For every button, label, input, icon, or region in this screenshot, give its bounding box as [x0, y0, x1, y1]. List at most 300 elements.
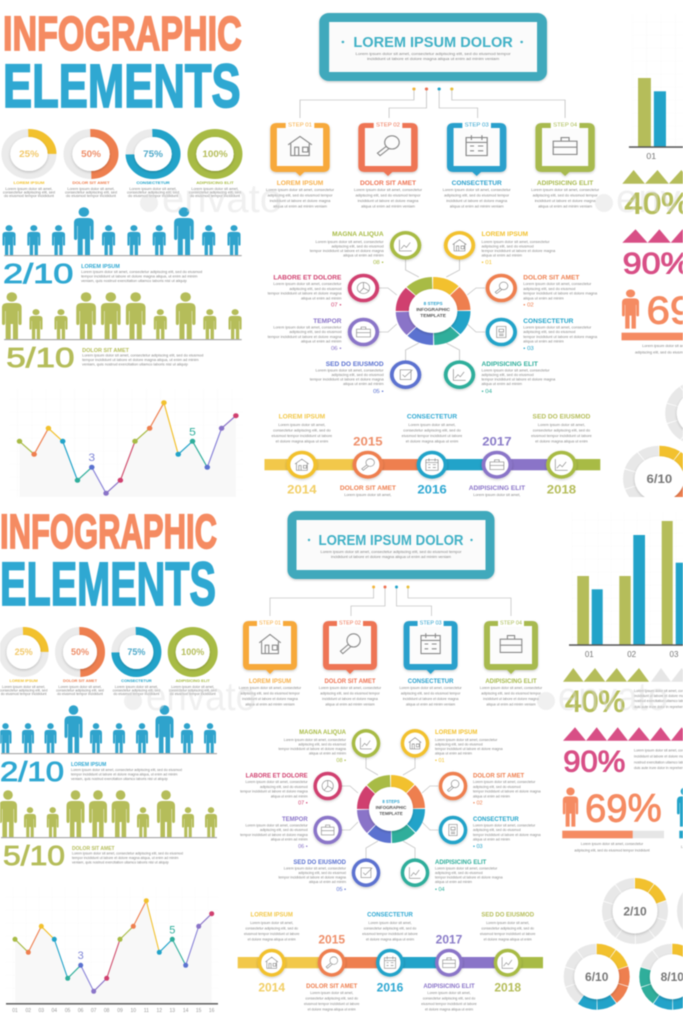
central wheel: TEMPLATE [379, 811, 403, 816]
item 1: • 01 [435, 758, 445, 764]
central wheel: 8 STEPS [424, 301, 443, 306]
ring 100% [169, 631, 217, 696]
line chart: 03 [45, 510, 52, 516]
item 6: tempor incididunt ut labore et dolore magna [240, 833, 308, 837]
node 2015: DOLOR SIT AMET [306, 984, 358, 990]
line chart [16, 400, 240, 497]
step 3: STEP 03 [465, 123, 489, 128]
bar chart: 01 [646, 151, 656, 161]
item 1: tempor incididunt ut labore et dolore magna [482, 249, 556, 253]
node 2016: consectetur adipiscing elit, sed do [403, 429, 461, 433]
step 2: Lorem ipsum dolor sit amet, consectetur [354, 188, 423, 192]
step 1: incididunt ut labore et dolore magna [270, 199, 331, 203]
step 2: STEP 02 [339, 620, 361, 626]
central wheel: TEMPLATE [420, 313, 446, 318]
node 2015: 2015 [318, 933, 345, 947]
step 3: incididunt ut labore et dolore magna [446, 199, 508, 203]
ring 25% [3, 133, 55, 198]
item 3: aliqua ut enim ad minim [473, 837, 510, 841]
ring 50%: consectetur adipiscing elit, sed [65, 191, 117, 195]
stat 5/10: 5/10 [6, 342, 75, 374]
item 8: MAGNA ALIQUA [332, 231, 384, 238]
bar chart [628, 77, 683, 160]
bar chart: 02 [627, 650, 637, 659]
line chart: 11 [144, 1008, 149, 1014]
line chart: 09 [117, 1008, 123, 1014]
node 2015: Lorem ipsum dolor sit amet, [310, 991, 353, 995]
item 6: adipiscing elit, sed do eiusmod [260, 828, 308, 832]
stat 90% [622, 229, 683, 280]
node 2014 [244, 913, 299, 995]
stat 40% [622, 170, 683, 220]
line chart: 07 [103, 510, 109, 516]
item 7: tempor incididunt ut labore et dolore magna [268, 292, 342, 296]
item 1 [401, 729, 503, 764]
node 2014 [272, 414, 332, 497]
item 2: adipiscing elit, sed do eiusmod [523, 287, 575, 291]
node 2018: et dolore magna aliqua ut enim [484, 938, 532, 942]
item 8: aliqua ut enim ad minim [343, 254, 384, 257]
stat 2/10: tempor incididunt ut labore et dolore magna aliqua, ut enim ad minim [81, 275, 197, 278]
steps [266, 121, 600, 208]
item 7: 07 • [298, 800, 308, 806]
step 2: incididunt ut labore et dolore magna [358, 199, 419, 203]
header box: Lorem ipsum dolor sit amet, consectetur adipiscing elit, sed do eiusmod tempor [320, 550, 462, 554]
item 4: Lorem ipsum dolor sit amet, consectetur [482, 369, 550, 372]
ring 75% [127, 133, 179, 198]
steps [239, 619, 543, 706]
central wheel [363, 781, 419, 837]
stat 69%: 69% [585, 788, 662, 831]
step 1 [239, 619, 302, 706]
line chart: 15 [219, 510, 225, 516]
item 3: Lorem ipsum dolor sit amet, consectetur [523, 326, 592, 330]
item 5: aliqua ut enim ad minim [309, 880, 346, 884]
item 8: 08 • [336, 758, 346, 764]
ring 25%: do eiusmod tempor incididunt [4, 194, 54, 198]
node 2017: eiusmod tempor incididunt ut labore [421, 1002, 477, 1006]
ring 75%: Lorem ipsum dolor sit amet, [129, 187, 177, 191]
line chart [6, 887, 218, 1014]
step 1: adipiscing elit, sed do eiusmod tempor [240, 692, 301, 696]
item 2 [439, 772, 541, 806]
stat 2/10 [4, 262, 202, 285]
item 5: SED DO EIUSMOD [293, 860, 347, 866]
ring 50%: DOLOR SIT AMET [72, 180, 110, 185]
line chart: 13 [189, 510, 196, 516]
item 3: Lorem ipsum dolor sit amet, consectetur [473, 824, 536, 828]
step 2: DOLOR SIT AMET [360, 180, 416, 187]
step 4: Lorem ipsum dolor sit amet, consectetur [480, 686, 543, 690]
line chart: 09 [132, 510, 138, 516]
line chart: 07 [91, 1008, 97, 1014]
header box: LOREM IPSUM DOLOR [353, 35, 513, 51]
step 2: Lorem ipsum dolor sit amet, consectetur [319, 686, 382, 690]
item 3: adipiscing elit, sed do eiusmod [473, 828, 521, 832]
progress rings [3, 133, 241, 198]
ring 75%: CONSECTETUR [136, 180, 170, 185]
step 2: adipiscing elit, sed do eiusmod tempor [320, 692, 381, 696]
item 6: 06 • [298, 844, 308, 850]
ring 25%: consectetur adipiscing elit, sed [3, 191, 55, 195]
node 2017: 2017 [436, 933, 463, 947]
item 6: TEMPOR [282, 817, 308, 823]
node 2017 [421, 933, 477, 1012]
node 2018 [480, 913, 535, 995]
stat 69% [622, 289, 683, 354]
stat 5/10 [6, 346, 204, 369]
step 1: aliqua ut enim ad minim veniam [273, 205, 327, 208]
item 7: adipiscing elit, sed do eiusmod [289, 287, 341, 291]
step 1 [266, 121, 335, 208]
item 8 [278, 729, 380, 764]
item 7: Lorem ipsum dolor sit amet, consectetur [273, 282, 342, 286]
bottom sheet [0, 506, 683, 1014]
item 3 [486, 318, 598, 352]
item 8: MAGNA ALIQUA [299, 730, 347, 736]
step 2: incididunt ut labore et dolore magna [322, 697, 378, 701]
stat 2/10: LOREM IPSUM [71, 762, 106, 768]
item 8: aliqua ut enim ad minim [309, 752, 346, 756]
item 8: adipiscing elit, sed do eiusmod [298, 742, 346, 746]
item 6: adipiscing elit, sed do eiusmod [289, 330, 341, 334]
donut 8/10 [645, 949, 683, 1004]
node 2015: DOLOR SIT AMET [340, 485, 396, 492]
header box [288, 511, 494, 579]
item 1: tempor incididunt ut labore et dolore magna [435, 747, 503, 751]
stat female [677, 787, 683, 849]
line chart: 11 [161, 510, 167, 516]
step 4: adipiscing elit, sed do eiusmod tempor [481, 692, 542, 696]
ring 25%: do eiusmod tempor incididunt [1, 692, 46, 696]
line chart: 3 [78, 950, 84, 962]
ring 50% [56, 631, 104, 696]
item 5: aliqua ut enim ad minim [343, 382, 384, 386]
step 4: incididunt ut labore et dolore magna [535, 199, 597, 203]
ring 100%: consectetur adipiscing elit, sed [189, 191, 241, 195]
node 2016: et dolore magna aliqua ut enim [366, 938, 414, 942]
line chart: 04 [60, 510, 66, 516]
node 2018: eiusmod tempor incididunt ut labore [531, 434, 592, 438]
item 6 [268, 318, 379, 352]
node 2015: Lorem ipsum dolor sit amet, [344, 493, 391, 497]
watermark: envato [124, 177, 683, 719]
progress rings [0, 631, 217, 696]
node 2014: eiusmod tempor incididunt ut labore [244, 932, 299, 936]
step 1: STEP 01 [259, 620, 281, 626]
timeline [238, 913, 543, 1012]
item 5: SED DO EIUSMOD [326, 361, 384, 368]
ring 25%: Lorem ipsum dolor sit amet, [2, 685, 45, 689]
item 5: adipiscing elit, sed do eiusmod [331, 373, 384, 377]
item 2: tempor incididunt ut labore et dolore magna [473, 790, 541, 794]
stat 5/10: veniam, quis nostrud exercitation ullamco laboris nisi ut aliquip [72, 860, 169, 864]
node 2016: Lorem ipsum dolor sit amet, [408, 423, 456, 427]
ring 50%: consectetur adipiscing elit, sed [56, 689, 104, 693]
item 8 [310, 231, 421, 266]
stat 2/10: LOREM IPSUM [81, 264, 121, 270]
line chart: 14 [183, 1008, 189, 1014]
ring 50%: do eiusmod tempor incididunt [66, 194, 116, 198]
node 2016: 2016 [417, 483, 447, 497]
central wheel: INFOGRAPHIC [416, 307, 451, 312]
watermark: envato: envato [558, 675, 668, 719]
line chart: 05 [65, 1008, 71, 1014]
line chart: 3 [88, 452, 95, 464]
node 2014: consectetur adipiscing elit, sed do [245, 927, 298, 931]
item 8: Lorem ipsum dolor sit amet, consectetur [284, 738, 347, 742]
ring 75%: do eiusmod tempor incididunt [114, 692, 159, 696]
node 2014: 2014 [258, 981, 285, 995]
ring 75%: do eiusmod tempor incididunt [128, 194, 178, 198]
line chart: 06 [78, 1008, 84, 1014]
stat 2/10: veniam, quis nostrud exercitation ullamco laboris nisi ut aliquip [71, 777, 168, 781]
stat 90%: 90% [563, 746, 625, 779]
item 1: LOREM IPSUM [482, 231, 528, 238]
step 1: Lorem ipsum dolor sit amet, consectetur [239, 686, 302, 690]
ring 50%: Lorem ipsum dolor sit amet, [67, 187, 115, 191]
line chart: 12 [175, 510, 181, 516]
item 7: Lorem ipsum dolor sit amet, consectetur [245, 780, 309, 784]
connector lines [270, 586, 511, 616]
line chart: 10 [131, 1008, 136, 1014]
node 2016: Lorem ipsum dolor sit amet, [368, 921, 412, 925]
node 2018: Lorem ipsum dolor sit amet, [486, 921, 529, 925]
step 1: STEP 01 [288, 123, 312, 128]
title [4, 14, 242, 110]
item 4: ADIPISICING ELIT [435, 860, 487, 866]
item 4: aliqua ut enim ad minim [482, 382, 522, 386]
node 2017: Lorem ipsum dolor sit amet, [427, 991, 471, 995]
ring 75%: 75% [143, 149, 164, 160]
bar chart: 01 [585, 650, 594, 659]
stat 2/10: Lorem ipsum dolor sit amet, consectetur adipiscing elit, sed do eiusmod [71, 768, 182, 772]
ring 25%: LOREM IPSUM [14, 180, 45, 185]
ring 75%: CONSECTETUR [121, 678, 152, 683]
node 2016: et dolore magna aliqua ut enim [406, 440, 458, 444]
stat 5/10: Lorem ipsum dolor sit amet, consectetur adipiscing elit, sed do eiusmod [72, 852, 183, 856]
node 2018 [531, 414, 592, 497]
stat 5/10: DOLOR SIT AMET [72, 846, 115, 852]
item 4 [401, 858, 503, 893]
node 2018: eiusmod tempor incididunt ut labore [480, 932, 535, 936]
node 2017: eiusmod tempor incididunt ut labore [467, 504, 527, 508]
donut 2/10 [608, 884, 662, 938]
node 2014: consectetur adipiscing elit, sed do [273, 429, 331, 433]
step 2: adipiscing elit, sed do eiusmod tempor [355, 194, 421, 197]
ring 50% [65, 133, 117, 198]
item 6: Lorem ipsum dolor sit amet, consectetur [245, 824, 309, 828]
item 4: aliqua ut enim ad minim [435, 880, 472, 884]
node 2018: consectetur adipiscing elit, sed do [533, 429, 590, 433]
item 8: Lorem ipsum dolor sit amet, consectetur [316, 240, 384, 244]
stat 40%: 40% [565, 686, 625, 719]
people row 5/10 [0, 790, 217, 838]
item 4: Lorem ipsum dolor sit amet, consectetur [435, 866, 498, 870]
item 8: tempor incididunt ut labore et dolore magna [278, 747, 346, 751]
line chart: 06 [89, 510, 95, 516]
title: ELEMENTS [0, 550, 216, 618]
timeline [264, 413, 602, 498]
ring 25%: 25% [19, 149, 39, 160]
stat 5/10: tempor incididunt ut labore et dolore magna aliqua, ut enim ad minim [72, 856, 179, 860]
item 6 [240, 816, 342, 850]
watermark: envato: envato [146, 675, 256, 719]
node 2015: et dolore magna aliqua ut enim [342, 510, 394, 514]
item 5 [310, 360, 421, 395]
title [0, 506, 217, 618]
item 4: • 04 [435, 887, 445, 893]
stat 2/10: 2/10 [0, 756, 64, 787]
node 2015: 2015 [353, 435, 383, 449]
step 2: STEP 02 [376, 123, 400, 128]
stat 5/10 [3, 840, 183, 871]
item 2: DOLOR SIT AMET [473, 774, 524, 780]
item 8: adipiscing elit, sed do eiusmod [331, 245, 384, 248]
item 7: LABORE ET DOLORE [273, 275, 341, 281]
line chart: 12 [157, 1008, 162, 1014]
central wheel: INFOGRAPHIC [376, 805, 407, 810]
step 4: STEP 04 [500, 620, 522, 626]
line chart: 13 [170, 1008, 175, 1014]
item 7: 07 • [331, 303, 341, 308]
step 2: DOLOR SIT AMET [324, 679, 376, 685]
step 4: aliqua ut enim ad minim veniam [538, 205, 592, 208]
stat 5/10: veniam, quis nostrud exercitation ullamco laboris nisi ut aliquip [82, 363, 188, 366]
item 3: aliqua ut enim ad minim [523, 339, 564, 343]
stat 5/10: 5/10 [3, 840, 65, 871]
item 5: 05 • [373, 389, 384, 395]
item 3: CONSECTETUR [523, 318, 574, 325]
node 2014: et dolore magna aliqua ut enim [276, 440, 328, 444]
node 2015: et dolore magna aliqua ut enim [308, 1008, 356, 1012]
stat 5/10: Lorem ipsum dolor sit amet, consectetur adipiscing elit, sed do eiusmod [82, 354, 203, 357]
line chart: 08 [117, 510, 124, 516]
ring 100%: consectetur adipiscing elit, sed [169, 689, 217, 693]
stat 2/10: Lorem ipsum dolor sit amet, consectetur adipiscing elit, sed do eiusmod [81, 270, 202, 274]
node 2018: SED DO EIUSMOD [481, 913, 535, 919]
item 1: • 01 [482, 260, 492, 266]
line chart: 08 [104, 1008, 110, 1014]
ring 75% [113, 631, 160, 696]
step 2: aliqua ut enim ad minim veniam [325, 702, 375, 706]
node 2017: ADIPISICING ELIT [469, 485, 525, 492]
item 3: tempor incididunt ut labore et dolore magna [523, 335, 598, 339]
line chart: 16 [209, 1008, 215, 1014]
item 6: aliqua ut enim ad minim [271, 837, 308, 841]
item 4: tempor incididunt ut labore et dolore magna [482, 378, 556, 381]
item 3: • 03 [473, 844, 483, 850]
node 2018: SED DO EIUSMOD [533, 414, 591, 421]
8 steps circular diagram [240, 729, 541, 893]
step 3: adipiscing elit, sed do eiusmod tempor [444, 194, 510, 197]
donut 6/10: 6/10 [647, 473, 672, 486]
donut 6/10 [569, 949, 624, 1004]
people row 5/10 [2, 292, 242, 340]
ring 50%: 50% [81, 149, 102, 160]
step 3: Lorem ipsum dolor sit amet, consectetur [443, 188, 511, 192]
item 1: LOREM IPSUM [435, 730, 477, 736]
node 2015 [340, 436, 396, 498]
step 2 [354, 121, 423, 208]
node 2016: consectetur adipiscing elit, sed do [364, 927, 416, 931]
ring 75%: consectetur adipiscing elit, sed [113, 689, 160, 693]
ring 25%: 25% [15, 647, 33, 657]
item 2: DOLOR SIT AMET [523, 275, 580, 281]
node 2018: 2018 [494, 981, 521, 995]
item 2: • 02 [523, 303, 534, 308]
node 2016 [362, 913, 418, 995]
title: ELEMENTS [3, 52, 241, 120]
central wheel: 8 STEPS [382, 799, 400, 804]
item 6: TEMPOR [313, 318, 342, 325]
line chart: 01 [12, 1008, 18, 1014]
node 2015: eiusmod tempor incididunt ut labore [304, 1002, 359, 1006]
bar chart: 03 [670, 650, 679, 659]
step 3: aliqua ut enim ad minim veniam [406, 702, 455, 706]
step 1: LOREM IPSUM [249, 679, 291, 685]
ring 50%: Lorem ipsum dolor sit amet, [58, 685, 102, 689]
ring 100%: ADIPISICING ELIT [196, 180, 234, 185]
item 5 [278, 858, 380, 893]
step 3: incididunt ut labore et dolore magna [403, 697, 458, 701]
step 1: Lorem ipsum dolor sit amet, consectetur [266, 188, 335, 192]
header box: Lorem ipsum dolor sit amet, consectetur adipiscing elit, sed do eiusmod tempor [356, 52, 512, 56]
item 1: adipiscing elit, sed do eiusmod [435, 742, 483, 746]
central wheel [402, 283, 464, 339]
item 7: aliqua ut enim ad minim [271, 794, 308, 798]
step 4: adipiscing elit, sed do eiusmod tempor [533, 194, 598, 197]
item 6: tempor incididunt ut labore et dolore magna [268, 335, 342, 339]
item 3: • 03 [523, 346, 534, 352]
stat 5/10: DOLOR SIT AMET [82, 348, 130, 354]
stat 2/10: veniam, quis nostrud exercitation ullamco laboris nisi ut aliquip [81, 279, 187, 283]
step 3 [443, 121, 511, 208]
item 3: tempor incididunt ut labore et dolore magna [473, 833, 541, 837]
item 4 [444, 360, 556, 395]
header box: LOREM IPSUM DOLOR [318, 533, 464, 549]
bar chart [569, 512, 683, 659]
step 2 [319, 619, 382, 706]
ring 75%: consectetur adipiscing elit, sed [127, 191, 179, 195]
item 5: 05 • [336, 887, 346, 893]
ring 100%: Lorem ipsum dolor sit amet, [171, 685, 214, 689]
node 2015 [304, 933, 359, 1012]
line chart: 15 [196, 1008, 202, 1014]
line chart: 16 [233, 510, 239, 516]
line chart: 01 [16, 510, 23, 516]
step 4 [531, 121, 600, 208]
step 3: adipiscing elit, sed do eiusmod tempor [401, 692, 461, 696]
ring 25%: consectetur adipiscing elit, sed [0, 689, 47, 693]
item 7: aliqua ut enim ad minim [301, 296, 341, 300]
donut 2/10 [671, 386, 683, 440]
step 3: STEP 03 [420, 620, 442, 626]
top sheet (stretched, cropped copy) [2, 6, 683, 516]
line chart: 5 [189, 427, 196, 438]
header box: incididunt ut labore et dolore magna aliqua ut enim ad minim veniam [331, 555, 451, 559]
stat 2/10: tempor incididunt ut labore et dolore magna aliqua, ut enim ad minim [71, 772, 178, 776]
item 7: LABORE ET DOLORE [246, 774, 308, 780]
item 5: adipiscing elit, sed do eiusmod [298, 871, 346, 875]
item 2: • 02 [473, 800, 483, 806]
connector lines [300, 88, 565, 118]
item 8: tempor incididunt ut labore et dolore magna [310, 249, 385, 253]
stat 2/10 [0, 756, 182, 787]
people row 2/10 [2, 207, 242, 256]
item 2: aliqua ut enim ad minim [473, 794, 510, 798]
item 1: adipiscing elit, sed do eiusmod [482, 245, 534, 248]
